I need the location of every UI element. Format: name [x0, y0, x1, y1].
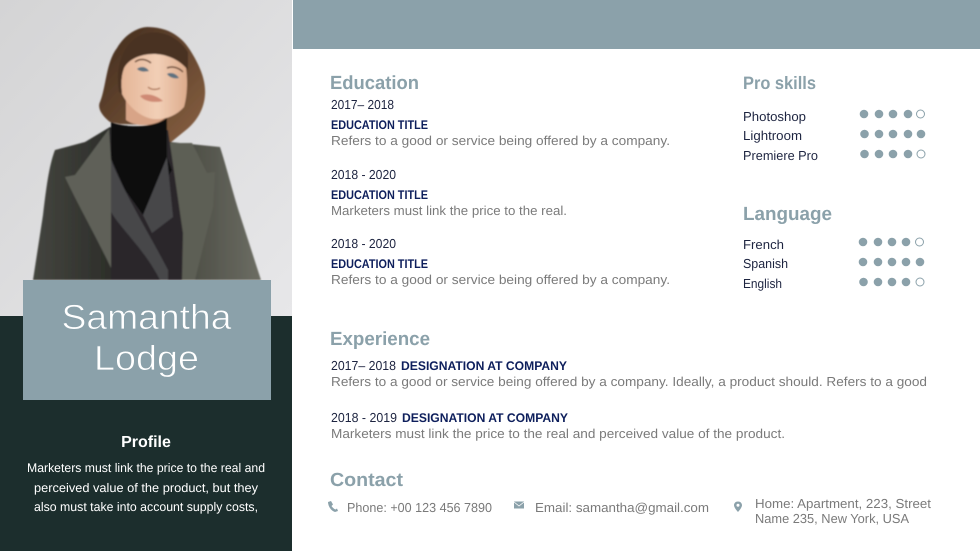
language: English: [743, 276, 782, 291]
language: French: [743, 237, 784, 252]
inner right lapel band: [143, 157, 173, 233]
brows: [135, 59, 183, 72]
experience: 2018 - 2019: [331, 410, 397, 425]
right lapel: [170, 143, 215, 280]
portrait photo: [33, 27, 261, 280]
experience: Marketers must link the price to the real and perceived value of the product.: [331, 426, 785, 441]
contact: Email: samantha@gmail.com: [535, 500, 709, 515]
icon: location pin: [734, 502, 742, 512]
name panel: [23, 280, 271, 400]
neck: [126, 100, 167, 125]
panel: photo background: [0, 0, 292, 316]
pro skills: [743, 73, 925, 163]
contact: Name 235, New York, USA: [755, 511, 909, 526]
name panel: Samantha: [62, 298, 232, 337]
language: Spanish: [743, 256, 788, 271]
panel: dark sidebar: [0, 316, 292, 551]
pro skills: Premiere Pro: [743, 148, 818, 163]
experience: [330, 329, 927, 441]
education: Education: [330, 73, 419, 94]
icon: phone: [328, 501, 338, 512]
experience: Refers to a good or service being offered by a company. Ideally, a product should. Refers to a good: [331, 374, 927, 389]
profile: [27, 434, 265, 514]
education: 2018 - 2020: [331, 236, 396, 251]
education: EDUCATION TITLE: [331, 118, 428, 132]
jacket: [33, 127, 261, 280]
profile: perceived value of the product, but they: [34, 481, 259, 495]
profile: Profile: [121, 434, 171, 451]
inner left lapel band: [111, 160, 168, 280]
language: Language: [743, 204, 832, 225]
dark inner top: [110, 130, 183, 280]
face: [121, 54, 187, 119]
hair back: [99, 27, 205, 143]
language: [743, 204, 924, 291]
contact: [328, 470, 931, 526]
experience: DESIGNATION AT COMPANY: [401, 359, 568, 373]
lips: [140, 94, 163, 102]
left lapel: [65, 129, 111, 268]
education: 2018 - 2020: [331, 167, 396, 182]
hair front strands: [118, 32, 188, 94]
education: Marketers must link the price to the real.: [331, 203, 567, 218]
profile: also must take into account supply costs,: [34, 500, 258, 514]
pro skills: Pro skills: [743, 73, 816, 93]
education: [330, 73, 670, 287]
contact: Home: Apartment, 223, Street: [755, 496, 931, 511]
education: Refers to a good or service being offered by a company.: [331, 133, 670, 148]
contact: Phone: +00 123 456 7890: [347, 500, 492, 515]
experience: 2017– 2018: [331, 358, 396, 373]
education: EDUCATION TITLE: [331, 257, 428, 271]
contact: Contact: [330, 470, 404, 491]
profile: Marketers must link the price to the real and: [27, 461, 265, 475]
eyes: [137, 67, 179, 78]
icon: mail: [514, 502, 524, 508]
education: Refers to a good or service being offered by a company.: [331, 272, 670, 287]
turtleneck: [111, 118, 172, 215]
pro skills: Photoshop: [743, 109, 806, 124]
nose: [148, 87, 160, 89]
education: EDUCATION TITLE: [331, 188, 428, 202]
experience: DESIGNATION AT COMPANY: [402, 411, 569, 425]
name panel: Lodge: [94, 339, 199, 378]
top banner: [293, 0, 980, 49]
education: 2017– 2018: [331, 97, 394, 112]
experience: Experience: [330, 329, 430, 350]
pro skills: Lightroom: [743, 128, 802, 143]
